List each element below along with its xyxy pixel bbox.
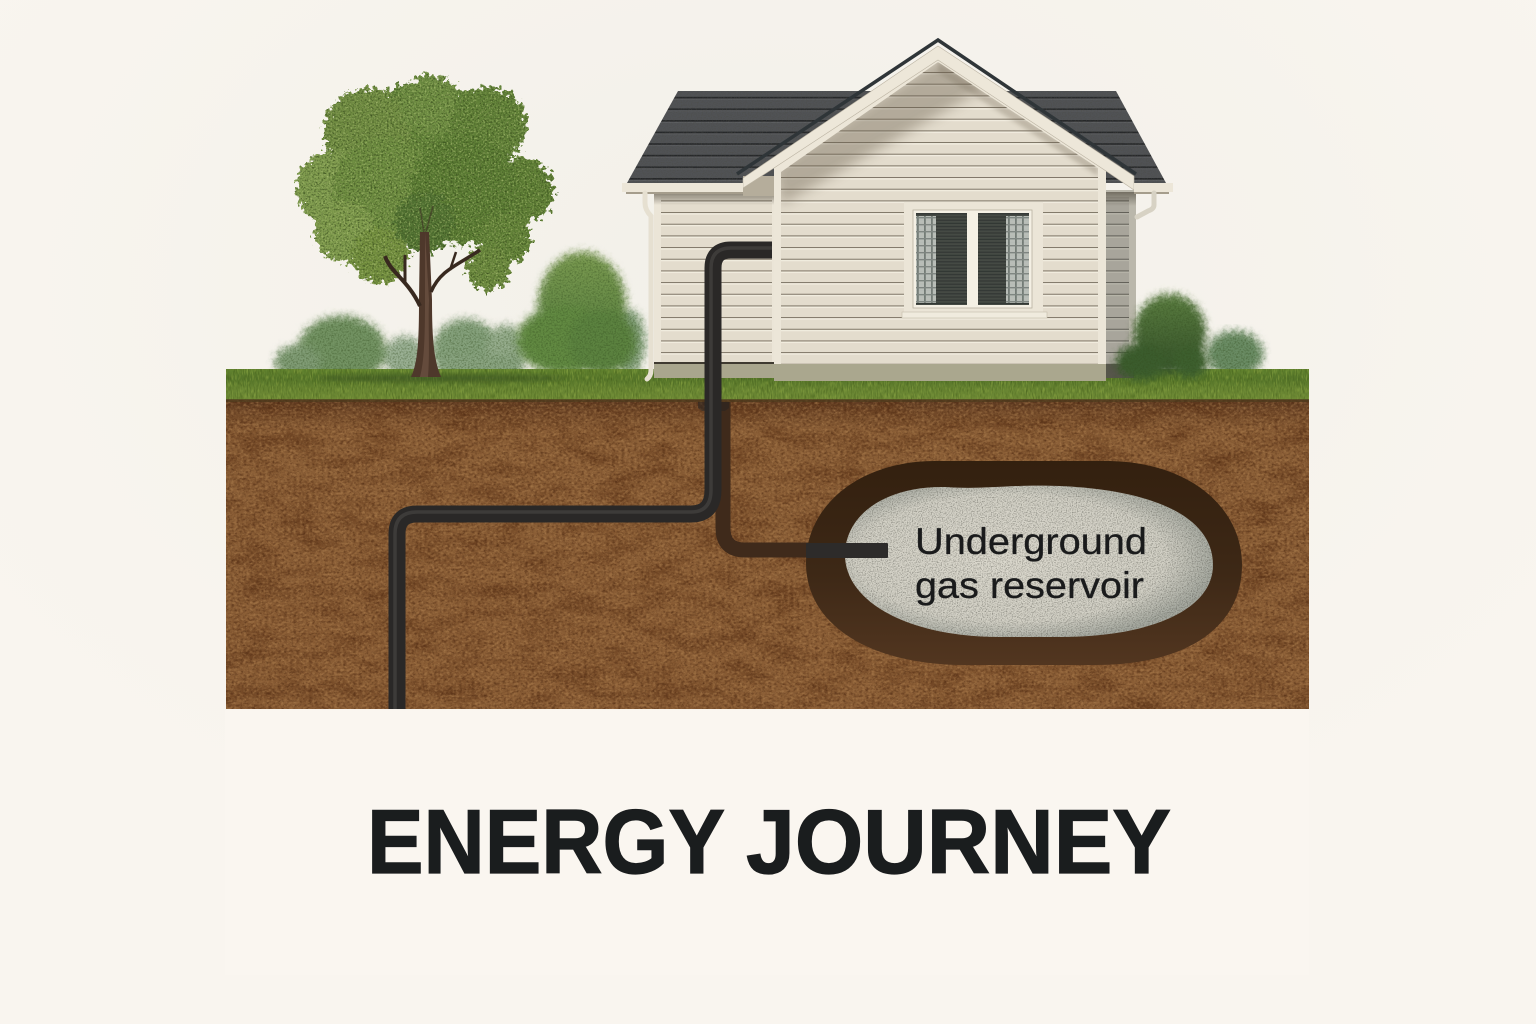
ground surface: grass xyxy=(226,369,1309,402)
roof ridge edge xyxy=(737,40,1136,174)
right downspout xyxy=(1137,193,1154,217)
window inner frame xyxy=(913,210,1032,308)
left downspout xyxy=(645,193,651,379)
reservoir label: Underground xyxy=(915,521,1147,562)
left background shrubs xyxy=(275,316,425,384)
roof xyxy=(627,91,1166,183)
title: ENERGY xyxy=(367,792,725,893)
window sill xyxy=(902,312,1047,318)
siding xyxy=(774,60,1098,364)
pipe ground collar xyxy=(698,402,729,411)
pipe highlight xyxy=(395,248,772,709)
right fascia and gutter xyxy=(1134,183,1173,194)
grass-soil edge xyxy=(226,399,1309,402)
tree xyxy=(296,75,565,382)
reservoir label xyxy=(915,521,1147,606)
right wing wall xyxy=(1104,190,1136,368)
near right bush xyxy=(1116,294,1208,380)
tree trunk and branches xyxy=(385,206,480,377)
soil cross-section xyxy=(226,400,1309,709)
title xyxy=(367,792,1171,893)
right window pane xyxy=(978,213,1029,305)
reservoir stone body xyxy=(845,486,1213,637)
right curtain xyxy=(1006,216,1029,303)
house xyxy=(622,40,1173,381)
large bush xyxy=(517,252,645,374)
tree shadow xyxy=(315,374,565,382)
branch trench to reservoir xyxy=(723,402,812,550)
window frame xyxy=(904,202,1043,313)
background bushes and trees xyxy=(275,252,1263,385)
far right shrub xyxy=(1207,331,1263,377)
left fascia and gutter xyxy=(622,183,743,194)
pipe body xyxy=(397,250,772,709)
left window pane xyxy=(916,213,967,305)
title: JOURNEY xyxy=(746,792,1171,893)
title panel xyxy=(225,710,1309,975)
foundation xyxy=(654,362,1134,381)
gable trim xyxy=(743,46,1134,190)
left curtain xyxy=(916,216,936,303)
middle background shrubs xyxy=(432,319,526,385)
main gable wall xyxy=(774,60,1106,364)
gas pipe stub xyxy=(806,543,888,558)
left wing wall xyxy=(654,176,774,364)
reservoir label: gas reservoir xyxy=(915,565,1144,606)
gas pipe xyxy=(395,248,772,709)
reservoir cavity xyxy=(806,461,1242,665)
window xyxy=(902,202,1047,318)
underground gas reservoir xyxy=(806,461,1242,665)
tree canopy xyxy=(296,75,553,290)
